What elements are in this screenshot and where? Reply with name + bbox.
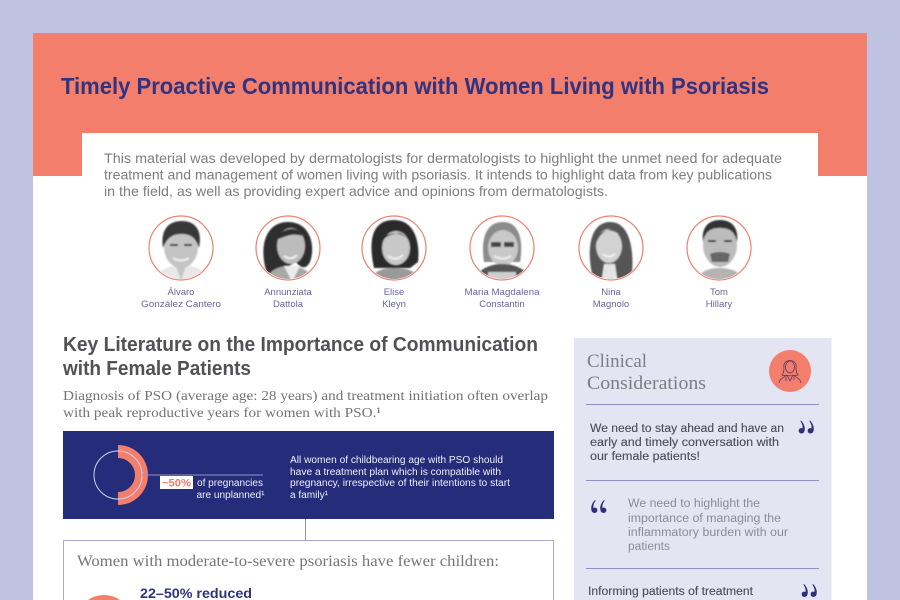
- connector: [305, 519, 306, 540]
- author names: González Cantero: [141, 299, 221, 310]
- sidebar heading: Clinical: [587, 352, 647, 372]
- author names: Tom: [710, 287, 728, 298]
- divider: [586, 480, 819, 481]
- icon circle: [88, 595, 120, 600]
- intro text: in the field, as well as providing expert advice and opinions from dermatologists.: [104, 183, 608, 199]
- icon: doctor: [769, 350, 811, 392]
- stat label: of pregnancies: [197, 478, 263, 489]
- authors row: [149, 216, 751, 285]
- quote 1: our female patients!: [590, 451, 700, 463]
- author names: Magnolo: [593, 299, 629, 310]
- intro text: [104, 150, 782, 199]
- quote 2: patients: [628, 541, 670, 553]
- author names: Kleyn: [382, 299, 406, 310]
- title: Timely Proactive Communication with Women Living with Psoriasis: [61, 73, 769, 99]
- stat label: [196, 478, 265, 501]
- quote 1: early and timely conversation with: [590, 437, 779, 449]
- treatment plan text: pregnancy, irrespective of their intentions to start: [290, 478, 510, 489]
- icon: closing quote: [799, 420, 814, 433]
- treatment plan text: have a treatment plan which is compatible with: [290, 467, 501, 478]
- author: Annunziata Dattola: [256, 216, 320, 285]
- author: Alvaro Gonzalez Cantero: [149, 216, 214, 282]
- header band: [33, 33, 867, 176]
- leader line: [142, 474, 263, 476]
- author: Nina Magnolo: [579, 216, 643, 284]
- author names: Elise: [384, 287, 404, 298]
- stat label: are unplanned¹: [196, 490, 265, 501]
- quote 2: inflammatory burden with our: [628, 527, 788, 539]
- author names: Álvaro: [168, 287, 194, 298]
- author names: Maria Magdalena: [464, 287, 540, 298]
- quote 3: [588, 584, 817, 598]
- sidebar heading: Considerations: [587, 374, 706, 394]
- treatment plan text: a family¹: [290, 490, 329, 501]
- author names: Hillary: [706, 299, 732, 310]
- quote 2: [591, 498, 788, 553]
- quote 1: [590, 420, 814, 463]
- author: Maria Magdalena Constantin: [470, 216, 534, 285]
- author: Tom Hillary: [687, 216, 751, 285]
- quote 2: We need to highlight the: [628, 498, 760, 510]
- intro text: treatment and management of women living with psoriasis. It intends to highlight data from key publications: [104, 166, 772, 182]
- sidebar heading: [587, 352, 706, 394]
- treatment plan text: All women of childbearing age with PSO should: [290, 455, 503, 466]
- divider: [586, 404, 819, 405]
- panel heading: Women with moderate-to-severe psoriasis have fewer children:: [77, 553, 499, 570]
- section heading: Key Literature on the Importance of Communication: [63, 334, 538, 356]
- author: Elise Kleyn: [362, 216, 426, 285]
- panel: unplanned pregnancies: [63, 431, 554, 519]
- section heading: with Female Patients: [62, 358, 251, 380]
- quote 3: Informing patients of treatment: [588, 586, 754, 598]
- author names: Dattola: [273, 299, 304, 310]
- divider: [586, 568, 819, 569]
- section heading: [62, 334, 538, 380]
- quote 1: We need to stay ahead and have an: [590, 423, 784, 435]
- stat: ~50%: ~50%: [162, 478, 191, 490]
- section intro text: [63, 389, 548, 421]
- quote 2: importance of managing the: [628, 513, 781, 525]
- author names: Constantin: [479, 299, 525, 310]
- icon: closing quote: [802, 584, 817, 597]
- panel: fewer children: [64, 540, 554, 600]
- treatment plan text: [290, 455, 510, 501]
- author names: [141, 287, 732, 310]
- intro panel: [82, 133, 818, 203]
- author names: Nina: [601, 287, 621, 298]
- intro text: This material was developed by dermatologists for dermatologists to highlight the unmet need for adequate: [104, 150, 782, 166]
- section intro text: Diagnosis of PSO (average age: 28 years) and treatment initiation often overlap: [63, 389, 548, 404]
- donut chart: ~50%: [94, 445, 148, 505]
- section intro text: with peak reproductive years for women with PSO.¹: [63, 406, 381, 421]
- panel: clinical considerations: [574, 338, 832, 600]
- icon: opening quote: [591, 500, 606, 513]
- author names: Annunziata: [264, 287, 312, 298]
